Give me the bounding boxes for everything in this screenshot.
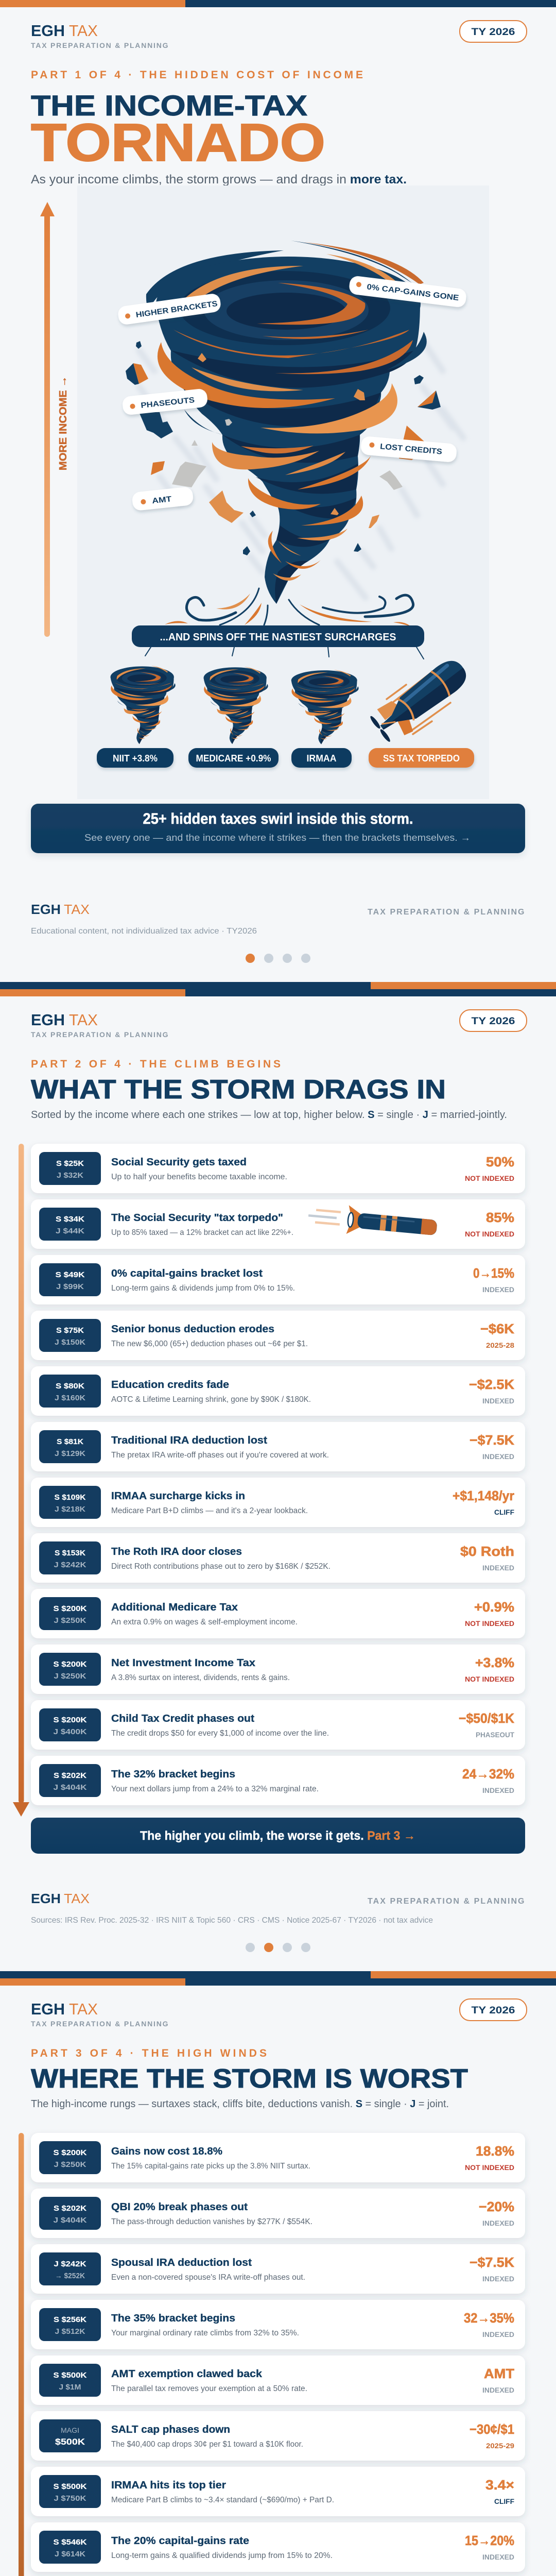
income chip: J $32K xyxy=(57,1171,83,1180)
row title: Social Security gets taxed xyxy=(111,1157,247,1168)
row value: 85% xyxy=(486,1210,514,1225)
title: WHERE THE STORM IS WORST xyxy=(31,2064,468,2094)
row tag: INDEXED xyxy=(482,1564,514,1572)
row: additional Medicare xyxy=(31,1589,525,1638)
page 3: where the storm is worst xyxy=(0,1978,556,2576)
income chip: $500K xyxy=(55,2437,85,2447)
tornado xyxy=(156,254,427,604)
row tag: PHASEOUT xyxy=(476,1731,515,1739)
income chip: S $75K xyxy=(56,1326,84,1335)
footer: Educational content, not individualized tax advice · TY2026 xyxy=(31,927,257,936)
income chip: J $404K xyxy=(54,1783,87,1792)
footer: Sources: IRS Rev. Proc. 2025-32 · IRS NIIT & Topic 560 · CRS · CMS · Notice 2025-67 · TY2026 · not tax advice xyxy=(31,1916,433,1925)
income timeline arrow xyxy=(13,1144,29,1817)
callout: the higher you climb xyxy=(31,1818,525,1854)
income chip: S $80K xyxy=(56,1382,84,1391)
row description: The 15% capital-gains rate picks up the 3.8% NIIT surtax. xyxy=(111,2162,310,2171)
row: AMT xyxy=(31,2355,525,2405)
row title: Additional Medicare Tax xyxy=(111,1602,238,1613)
row value: −20% xyxy=(479,2199,514,2214)
footer xyxy=(31,1891,525,1925)
header logo: TAX xyxy=(69,2000,98,2018)
row title: The 32% bracket begins xyxy=(111,1769,235,1780)
income chip xyxy=(39,2419,101,2452)
income chip xyxy=(39,1541,101,1574)
income chip: J $218K xyxy=(55,1505,85,1514)
income chip xyxy=(39,2252,101,2285)
income chip xyxy=(39,1708,101,1741)
tax year pill: TY 2026 xyxy=(472,2005,515,2016)
outer swooshes xyxy=(146,241,424,312)
income arrow xyxy=(40,202,69,637)
row tag: NOT INDEXED xyxy=(465,1675,514,1683)
row value: +0.9% xyxy=(474,1599,514,1615)
label: higher brackets xyxy=(117,293,222,326)
income chip xyxy=(39,2531,101,2564)
label: phaseouts xyxy=(122,388,208,415)
part label: PART 3 OF 4 · THE HIGH WINDS xyxy=(31,2047,267,2059)
row title: Child Tax Credit phases out xyxy=(111,1713,254,1724)
income chip xyxy=(39,1263,101,1296)
part label: PART 2 OF 4 · THE CLIMB BEGINS xyxy=(31,1058,281,1070)
banner: surcharges: ...AND SPINS OFF THE NASTIEST SURCHARGES xyxy=(160,632,396,643)
income chip: S $200K xyxy=(54,1660,87,1669)
row tag: INDEXED xyxy=(482,1286,514,1294)
row value: −$50/$1K xyxy=(459,1710,514,1726)
row value: 15→20% xyxy=(465,2533,514,2548)
row tag: INDEXED xyxy=(482,2275,514,2283)
row tag: INDEXED xyxy=(482,1397,514,1405)
income chip xyxy=(39,2141,101,2174)
subtitle: The high-income rungs — surtaxes stack, cliffs bite, deductions vanish. S = single · J = joint. xyxy=(31,2098,449,2110)
income chip xyxy=(39,2197,101,2230)
income chip: S $200K xyxy=(54,1716,87,1724)
header logo: TAX PREPARATION & PLANNING xyxy=(31,41,168,49)
row description: Your next dollars jump from a 24% to a 32% marginal rate. xyxy=(111,1785,319,1793)
row: IRMAA surcharge xyxy=(31,1478,525,1527)
row: IRMAA top tier xyxy=(31,2467,525,2516)
page 1: the income-tax tornado xyxy=(0,0,556,989)
income chip xyxy=(39,1486,101,1519)
row description: An extra 0.9% on wages & self-employment income. xyxy=(111,1618,298,1626)
tornado illustration panel xyxy=(77,185,489,799)
income chip: S $202K xyxy=(54,1771,86,1780)
income chip xyxy=(39,1430,101,1463)
row value: 3.4× xyxy=(485,2477,514,2493)
row description: The parallel tax removes your exemption at a 50% rate. xyxy=(111,2384,307,2393)
row value: −$7.5K xyxy=(470,2255,514,2270)
row tag: NOT INDEXED xyxy=(465,1620,514,1628)
row title: The 35% bracket begins xyxy=(111,2313,235,2324)
footer: TAX PREPARATION & PLANNING xyxy=(368,908,525,917)
row tag: INDEXED xyxy=(482,2553,514,2561)
income chip: J $44K xyxy=(56,1227,84,1235)
income chip xyxy=(39,1653,101,1686)
row value: 18.8% xyxy=(476,2143,514,2159)
part label: PART 1 OF 4 · THE HIDDEN COST OF INCOME xyxy=(31,69,363,81)
income chip: S $49K xyxy=(56,1270,85,1279)
footer: TAX PREPARATION & PLANNING xyxy=(368,1897,525,1906)
row: QBI xyxy=(31,2189,525,2238)
income chip: J $512K xyxy=(55,2327,85,2336)
row value: −$2.5K xyxy=(469,1377,514,1392)
row: 35% bracket xyxy=(31,2300,525,2349)
row description: Your marginal ordinary rate climbs from 32% to 35%. xyxy=(111,2329,299,2337)
row tag: CLIFF xyxy=(494,2498,514,2505)
row value: 32→35% xyxy=(464,2310,514,2326)
row description: Long-term gains & qualified dividends jump from 15% to 20%. xyxy=(111,2551,333,2560)
income chip: S $200K xyxy=(54,2148,87,2157)
row description: Up to 85% taxed — a 12% bracket can act like 22%+. xyxy=(111,1228,293,1237)
income chip: S $109K xyxy=(55,1493,86,1502)
row tag: INDEXED xyxy=(482,1787,514,1794)
row title: Senior bonus deduction erodes xyxy=(111,1324,274,1335)
income chip: J $750K xyxy=(54,2494,86,2503)
income chip: S $500K xyxy=(54,2371,87,2380)
row description: The credit drops $50 for every $1,000 of income over the line. xyxy=(111,1729,329,1738)
row description: The pass-through deduction vanishes by $277K / $554K. xyxy=(111,2217,312,2226)
income chip: J $400K xyxy=(54,1727,87,1736)
row title: SALT cap phases down xyxy=(111,2424,230,2435)
row description: Up to half your benefits become taxable income. xyxy=(111,1173,287,1181)
income chip: S $34K xyxy=(56,1215,84,1224)
row: senior bonus deduction xyxy=(31,1311,525,1360)
banner: surcharges xyxy=(132,625,424,647)
debris xyxy=(126,341,441,555)
chip: IRMAA xyxy=(291,748,352,768)
row: 20% capital gains xyxy=(31,2522,525,2572)
label: 0% cap-gains gone xyxy=(349,275,467,308)
small tornado: Medicare xyxy=(204,667,268,744)
row value: 0→15% xyxy=(473,1265,514,1281)
label: AMT: AMT xyxy=(151,495,172,505)
row title: QBI 20% break phases out xyxy=(111,2201,248,2213)
icon: torpedo xyxy=(308,1205,438,1242)
header logo xyxy=(31,22,168,49)
income chip xyxy=(39,1152,101,1185)
row tag: CLIFF xyxy=(494,1509,514,1516)
row title: The 20% capital-gains rate xyxy=(111,2535,249,2547)
footer: EGH xyxy=(31,1891,61,1906)
row title: Net Investment Income Tax xyxy=(111,1657,255,1669)
income chip: S $256K xyxy=(54,2315,86,2324)
callout: 25+ hidden taxes: See every one — and the income where it strikes — then the brackets themselves. → xyxy=(84,832,471,843)
income chip: J $242K xyxy=(54,1561,86,1569)
row title: The Social Security "tax torpedo" xyxy=(111,1212,283,1224)
row description: The new $6,000 (65+) deduction phases out ~6¢ per $1. xyxy=(111,1340,308,1348)
header logo: EGH xyxy=(31,22,65,40)
income chip: J $614K xyxy=(55,2550,85,2558)
title: WHAT THE STORM DRAGS IN xyxy=(31,1075,446,1105)
label: 0% cap-gains gone: 0% CAP-GAINS GONE xyxy=(366,282,459,302)
income chip: J $250K xyxy=(54,1616,86,1625)
row title: IRMAA surcharge kicks in xyxy=(111,1490,245,1502)
row tag: NOT INDEXED xyxy=(465,1230,514,1238)
header logo: TAX xyxy=(69,22,98,40)
row description: Medicare Part B climbs to ~3.4× standard (~$690/mo) + Part D. xyxy=(111,2496,334,2504)
income chip: S $200K xyxy=(54,1604,87,1613)
row description: Long-term gains & dividends jump from 0% to 15%. xyxy=(111,1284,295,1293)
row title: 0% capital-gains bracket lost xyxy=(111,1268,263,1279)
label: lost credits xyxy=(360,436,457,463)
row value: −30¢/$1 xyxy=(470,2421,514,2437)
row value: $0 Roth xyxy=(460,1544,514,1559)
income timeline arrow xyxy=(13,2133,29,2576)
income chip: S $202K xyxy=(54,2204,86,2213)
row title: Traditional IRA deduction lost xyxy=(111,1435,267,1446)
row value: 24→32% xyxy=(462,1766,514,1782)
small tornado: NIIT xyxy=(111,666,176,744)
chip: SS tax torpedo: SS TAX TORPEDO xyxy=(383,753,460,764)
chip: Medicare: MEDICARE +0.9% xyxy=(196,753,271,764)
row tag: INDEXED xyxy=(482,2386,514,2394)
tax year pill: TY 2026 xyxy=(472,27,515,38)
income arrow: MORE INCOME → xyxy=(58,376,69,470)
income chip xyxy=(39,1597,101,1630)
income chip: J $250K xyxy=(54,1672,86,1681)
row tag: 2025-28 xyxy=(486,1342,515,1349)
small tornado: IRMAA xyxy=(291,670,359,744)
row description: The pretax IRA write-off phases out if you're covered at work. xyxy=(111,1451,329,1460)
row: 32% bracket xyxy=(31,1756,525,1805)
row: 0% capital gains xyxy=(31,1255,525,1304)
row: spousal IRA xyxy=(31,2244,525,2294)
subtitle: Sorted by the income where each one strikes — low at top, higher below. S = single · J = married-jointly. xyxy=(31,1109,507,1121)
tax year pill: TY 2026 xyxy=(472,1016,515,1027)
income chip: MAGI xyxy=(61,2426,79,2434)
row: SALT cap xyxy=(31,2411,525,2461)
footer xyxy=(31,902,525,936)
income chip: → $252K xyxy=(55,2272,85,2280)
income chip: J $404K xyxy=(54,2216,87,2225)
tax year pill xyxy=(460,1010,527,1031)
header logo: EGH xyxy=(31,2000,65,2018)
title xyxy=(31,89,325,172)
row tag: NOT INDEXED xyxy=(465,2164,514,2172)
base swirls xyxy=(145,588,424,659)
tax year pill xyxy=(460,21,527,42)
header logo: TAX PREPARATION & PLANNING xyxy=(31,1030,168,1039)
footer: EGH xyxy=(31,902,61,917)
row description: Even a non-covered spouse's IRA write-off phases out. xyxy=(111,2273,305,2282)
row title: Gains now cost 18.8% xyxy=(111,2146,222,2157)
row value: −$6K xyxy=(480,1321,514,1336)
footer: TAX xyxy=(64,1891,90,1906)
row description: Direct Roth contributions phase out to zero by $168K / $252K. xyxy=(111,1562,331,1571)
row: child tax credit xyxy=(31,1700,525,1750)
callout: the higher you climb: The higher you climb, the worse it gets. Part 3 → xyxy=(140,1829,415,1843)
footer: TAX xyxy=(64,902,90,917)
header logo: EGH xyxy=(31,1011,65,1029)
page 2: what the storm drags in xyxy=(0,989,556,1978)
income chip: J $150K xyxy=(55,1338,85,1347)
chip: IRMAA: IRMAA xyxy=(307,753,337,764)
income chip: S $546K xyxy=(54,2538,87,2547)
income chip: S $153K xyxy=(55,1549,85,1557)
income chip: J $1M xyxy=(59,2383,81,2392)
income chip: J $129K xyxy=(55,1449,85,1458)
income chip: S $500K xyxy=(54,2482,87,2491)
row: Roth IRA door xyxy=(31,1533,525,1583)
title: THE INCOME-TAX xyxy=(31,89,307,122)
income chip: S $81K xyxy=(57,1437,83,1446)
row description: Medicare Part B+D climbs — and it's a 2-year lookback. xyxy=(111,1506,308,1515)
label: higher brackets: HIGHER BRACKETS xyxy=(135,299,218,319)
subtitle: As your income climbs, the storm grows — and drags in more tax. xyxy=(31,173,407,187)
row value: +$1,148/yr xyxy=(453,1488,514,1503)
chip: SS tax torpedo xyxy=(369,748,474,768)
chip: NIIT xyxy=(97,748,173,768)
row: traditional IRA xyxy=(31,1422,525,1471)
label: lost credits: LOST CREDITS xyxy=(380,442,443,456)
title: TORNADO xyxy=(31,113,325,172)
chip: NIIT: NIIT +3.8% xyxy=(113,753,158,764)
row title: IRMAA hits its top tier xyxy=(111,2480,226,2491)
row value: 50% xyxy=(486,1154,514,1170)
income chip: J $160K xyxy=(55,1394,85,1402)
income chip xyxy=(39,1208,101,1241)
row tag: INDEXED xyxy=(482,1453,514,1461)
chip: Medicare xyxy=(188,748,279,768)
row title: Spousal IRA deduction lost xyxy=(111,2257,252,2268)
callout: 25+ hidden taxes xyxy=(31,804,525,853)
income chip xyxy=(39,2475,101,2508)
row value: −$7.5K xyxy=(470,1432,514,1448)
income chip: J $242K xyxy=(54,2260,86,2268)
row title: AMT exemption clawed back xyxy=(111,2368,263,2380)
label: phaseouts: PHASEOUTS xyxy=(141,396,195,410)
income chip: J $99K xyxy=(56,1282,84,1291)
row title: The Roth IRA door closes xyxy=(111,1546,242,1557)
page dots xyxy=(246,954,310,963)
icon: SS tax torpedo xyxy=(368,653,476,748)
row value: +3.8% xyxy=(475,1655,514,1670)
header logo xyxy=(31,1011,168,1039)
row value: AMT xyxy=(484,2366,514,2381)
row description: AOTC & Lifetime Learning shrink, gone by $90K / $180K. xyxy=(111,1395,311,1404)
label: AMT xyxy=(131,486,194,511)
tax year pill xyxy=(460,1999,527,2021)
income chip xyxy=(39,2364,101,2397)
row description: The $40,400 cap drops 30¢ per $1 toward a $10K floor. xyxy=(111,2440,303,2449)
income chip xyxy=(39,1375,101,1408)
row: Social Security gets taxed xyxy=(31,1144,525,1193)
income chip xyxy=(39,1764,101,1797)
page dots xyxy=(246,1943,310,1952)
header logo: TAX PREPARATION & PLANNING xyxy=(31,2020,168,2028)
row: NIIT xyxy=(31,1645,525,1694)
row: education credits xyxy=(31,1366,525,1416)
row: tax torpedo xyxy=(31,1199,525,1249)
income chip: J $250K xyxy=(54,2160,86,2169)
header logo xyxy=(31,2000,168,2028)
income chip xyxy=(39,2308,101,2341)
row description: A 3.8% surtax on interest, dividends, rents & gains. xyxy=(111,1673,290,1682)
row: gains 18.8% xyxy=(31,2133,525,2182)
income chip: S $25K xyxy=(56,1159,84,1168)
row tag: INDEXED xyxy=(482,2331,514,2338)
row title: Education credits fade xyxy=(111,1379,229,1391)
row tag: 2025-29 xyxy=(486,2442,514,2450)
row tag: NOT INDEXED xyxy=(465,1175,514,1182)
header logo: TAX xyxy=(69,1011,98,1029)
income chip xyxy=(39,1319,101,1352)
row tag: INDEXED xyxy=(482,2219,514,2227)
callout: 25+ hidden taxes: 25+ hidden taxes swirl inside this storm. xyxy=(143,810,413,827)
